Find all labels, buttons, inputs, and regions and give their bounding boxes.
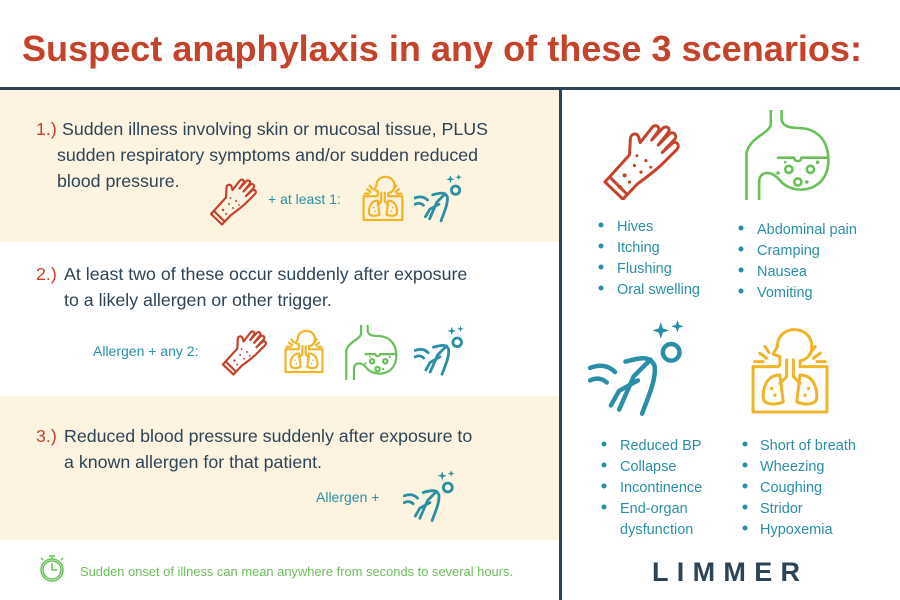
icon: falling person xyxy=(415,174,462,221)
GI list: Nausea xyxy=(757,264,808,280)
panel: respiratory symptoms xyxy=(742,330,856,538)
skin list: Hives xyxy=(617,219,653,235)
icon: lungs xyxy=(364,177,402,220)
circulatory list: dysfunction xyxy=(620,522,693,538)
scenario 3 text: Reduced blood pressure suddenly after exposure to xyxy=(64,426,472,446)
panel: scenario 3 xyxy=(0,396,559,540)
GI list: Cramping xyxy=(757,243,820,259)
icon: stomach xyxy=(346,325,396,380)
respiratory list: Wheezing xyxy=(760,459,824,475)
panel: circulatory symptoms xyxy=(590,320,702,538)
label: allergen +: Allergen + xyxy=(316,489,379,505)
icon: stomach xyxy=(746,110,828,200)
scenario 1 text: Sudden illness involving skin or mucosal tissue, PLUS xyxy=(62,119,488,139)
skin list: Itching xyxy=(617,240,660,256)
circulatory list: Collapse xyxy=(620,459,676,475)
panel: GI symptoms xyxy=(738,110,857,301)
icon: hand xyxy=(211,180,256,224)
skin list: Flushing xyxy=(617,261,672,277)
icon: hand xyxy=(223,331,266,375)
skin list: Oral swelling xyxy=(617,282,700,298)
title: Suspect anaphylaxis in any of these 3 scenarios: xyxy=(22,28,862,69)
GI list: Abdominal pain xyxy=(757,222,857,238)
footer text: Sudden onset of illness can mean anywhere from seconds to several hours. xyxy=(80,565,513,579)
skin list xyxy=(598,219,700,298)
scenario 3 text: 3.) xyxy=(36,426,57,446)
GI list xyxy=(738,222,857,301)
circulatory list: Reduced BP xyxy=(620,438,701,454)
panel: scenario 1 xyxy=(0,90,559,242)
circulatory list: End-organ xyxy=(620,501,688,517)
icon: falling person xyxy=(404,470,455,521)
scenario 3 text: a known allergen for that patient. xyxy=(64,452,322,472)
respiratory list: Hypoxemia xyxy=(760,522,833,538)
label: at least 1: + at least 1: xyxy=(268,191,341,207)
footer note xyxy=(41,556,513,581)
respiratory list xyxy=(742,438,856,538)
circulatory list: Incontinence xyxy=(620,480,702,496)
icon: falling person xyxy=(415,326,464,374)
scenario 2 text: 2.) xyxy=(36,264,57,284)
panel: scenario 2 xyxy=(36,264,467,380)
respiratory list: Short of breath xyxy=(760,438,856,454)
circulatory list xyxy=(602,438,702,538)
label: allergen + any 2: Allergen + any 2: xyxy=(93,343,198,359)
icon: lungs xyxy=(753,330,827,412)
logo: LIMMER: LIMMER xyxy=(652,557,800,587)
scenario 2 text: to a likely allergen or other trigger. xyxy=(64,290,332,310)
scenario 1 text: sudden respiratory symptoms and/or sudden reduced xyxy=(57,145,478,165)
dividers xyxy=(0,87,900,90)
scenario 1 text: blood pressure. xyxy=(57,171,180,191)
respiratory list: Stridor xyxy=(760,501,803,517)
GI list: Vomiting xyxy=(757,285,813,301)
icon: stopwatch xyxy=(41,556,63,581)
scenario 1 text: 1.) xyxy=(36,119,57,139)
respiratory list: Coughing xyxy=(760,480,822,496)
scenario 2 text: At least two of these occur suddenly after exposure xyxy=(64,264,467,284)
icon: falling person xyxy=(590,320,684,414)
panel: skin symptoms xyxy=(598,126,700,298)
icon: hand xyxy=(605,126,678,199)
icon: lungs xyxy=(286,331,322,372)
